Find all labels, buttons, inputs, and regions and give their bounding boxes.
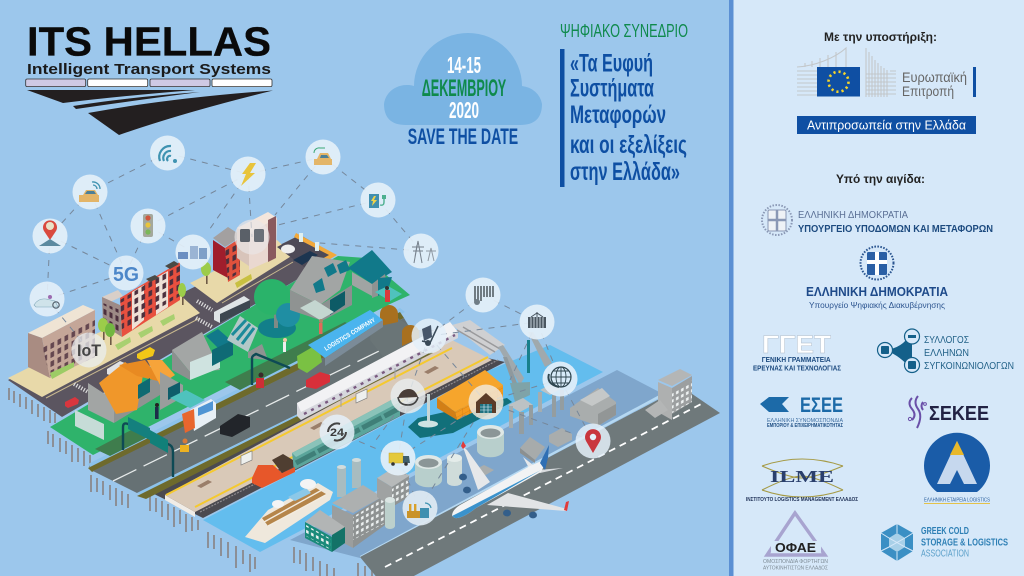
building: cream corner: [237, 212, 277, 270]
icon: 24 hours: 24: [330, 427, 345, 439]
scooter yellow: [180, 445, 189, 452]
dark green paths: [95, 322, 357, 456]
crosswalks: [74, 301, 212, 392]
cloud with dates: [384, 33, 542, 149]
road surface: [93, 318, 424, 493]
icon: public transport: [234, 220, 270, 254]
platform benches: [197, 366, 439, 488]
logo: GGET: ΓΕΝΙΚΗ ΓΡΑΜΜΑΤΕΙΑ: [762, 355, 831, 364]
driveway: [170, 390, 205, 408]
logo: OFAE: [763, 513, 829, 572]
logo: ILME: ΙΝΣΤΙΤΟΥΤΟ LOGISTICS MANAGEMENT ΕΛΛΑΔΟΣ: [746, 497, 859, 503]
rail lines: [158, 350, 498, 512]
road dashes: [113, 334, 414, 481]
pier posts: [9, 388, 372, 576]
logo: Ministry of Digital Governance: Υπουργείο Ψηφιακής Διακυβέρνησης: [809, 300, 945, 310]
logo: GGET: ΓΓΕΤ: [762, 331, 831, 359]
icon: IoT: [72, 332, 106, 368]
sidebar background: [734, 0, 1024, 576]
overhead road signs: [123, 354, 290, 477]
icon: charging station: [360, 182, 396, 218]
icon: cargo container: [520, 304, 554, 340]
icon: delivery hands: [390, 378, 426, 414]
conference kicker: ΨΗΦΙΑΚΟ ΣΥΝΕΔΡΙΟ: [560, 20, 688, 41]
icon: barcode: [466, 278, 500, 312]
building: red terrace: [102, 261, 180, 337]
land platform: [290, 370, 665, 558]
logo: ITS Hellas: [26, 18, 273, 135]
round tanks: [415, 425, 504, 487]
conference title: Μεταφορών: [570, 101, 666, 129]
building: left mauve: [28, 305, 95, 378]
cloud shape: [384, 33, 542, 125]
stabilizer: [523, 457, 538, 472]
logo wordmark: ITS HELLAS: [27, 18, 271, 64]
logo: Greek Cold Storage: [881, 524, 1008, 561]
people: [155, 286, 390, 419]
house: large grey: [290, 256, 352, 322]
main road with strips: [88, 308, 433, 499]
platform: [165, 340, 492, 512]
parked car: [293, 251, 318, 265]
main hall: [332, 485, 382, 513]
tracks: [152, 345, 505, 518]
factory: [305, 458, 410, 552]
logo: Hellenic Transport Engineers Association: ΕΛΛΗΝΩΝ: [924, 348, 969, 359]
big tree: [254, 279, 300, 338]
logo: SEKEE: [908, 396, 989, 428]
ministry text: ΕΛΛΗΝΙΚΗ ΔΗΜΟΚΡΑΤΙΑ: [798, 209, 908, 221]
date month: ΔΕΚΕΜΒΡΙΟΥ: [422, 75, 506, 102]
sidebar border: [729, 0, 734, 576]
logo: OFAE: ΟΦΑΕ: [775, 540, 816, 555]
billboards: [241, 389, 367, 465]
conference title: Συστήματα: [570, 74, 654, 102]
parking lot: [277, 233, 337, 272]
road edge lines: [46, 262, 293, 398]
conference title: [570, 50, 687, 186]
logo: Ministry of Digital Governance: [806, 246, 949, 310]
date days: 14-15: [447, 52, 481, 78]
representation banner: [797, 116, 976, 134]
logo: ESEE: ΕΣΕΕ: [800, 394, 843, 417]
upper train: [297, 322, 458, 420]
icon: location: [576, 424, 610, 458]
logo: ESEE: [760, 394, 844, 429]
logo: ESEE: ΕΜΠΟΡΙΟΥ & ΕΠΙΧΕΙΡΗΜΑΤΙΚΟΤΗΤΑΣ: [767, 423, 844, 429]
beige block left: [8, 293, 200, 397]
icon: globe: [542, 362, 578, 396]
parking dial: [281, 244, 295, 254]
icon: autonomous car: [30, 282, 64, 316]
sidebar panel: [729, 0, 1024, 576]
icon: hand trolley: [412, 318, 446, 354]
logo bars: [26, 79, 272, 87]
logo: Greek Cold Storage: GREEK COLD: [921, 526, 969, 537]
logo: GGET: ΕΡΕΥΝΑΣ ΚΑΙ ΤΕΧΝΟΛΟΓΙΑΣ: [753, 364, 841, 372]
platform edge: [165, 495, 195, 517]
logo: ILME: [746, 459, 859, 503]
bus: [214, 296, 250, 323]
lower freight train: [252, 398, 400, 488]
isometric smart city and logistics scene: [8, 136, 720, 576]
port sheds and crates: [474, 388, 616, 476]
runway: [360, 387, 720, 576]
blue line upper: [88, 308, 405, 469]
logo: Hellenic Transport Engineers Association: ΣΥΓΚΟΙΝΩΝΙΟΛΟΓΩΝ: [924, 361, 1014, 372]
black suv: [220, 414, 250, 437]
save the date: SAVE THE DATE: [408, 124, 518, 149]
icon: connected car: [72, 174, 108, 210]
hedge left: [50, 362, 74, 379]
white truck: [190, 399, 216, 431]
house: orange roof: [88, 360, 183, 423]
vehicles on road: [180, 310, 383, 452]
icon: smart factory: [402, 490, 438, 526]
icon: IoT: IoT: [77, 341, 102, 360]
title accent bar: [560, 49, 564, 187]
charging posts: [299, 233, 319, 251]
support heading: Με την υποστήριξη:: [824, 30, 937, 44]
seal: [762, 205, 792, 235]
icon: 5G: [108, 256, 144, 290]
parking yellow border: [294, 233, 337, 272]
logo: SEKEE: ΣΕΚΕΕ: [929, 403, 989, 425]
logo: Ministry of Infrastructure: ΥΠΟΥΡΓΕΙΟ ΥΠΟΔΟΜΩΝ ΚΑΙ ΜΕΤΑΦΟΡΩΝ: [798, 224, 993, 235]
chimneys: [337, 458, 361, 497]
logo: GGET: [753, 331, 841, 372]
commission name: Ευρωπαϊκή: [902, 69, 967, 85]
logo: Hellenic Logistics Society: [924, 433, 990, 504]
commission bar: [973, 67, 976, 97]
engines: [459, 474, 537, 518]
icon: power pylons: [404, 234, 438, 268]
small block: [377, 467, 410, 487]
logo: Hellenic Transport Engineers Association: [878, 329, 1014, 372]
seal: [860, 246, 894, 280]
tunnel wall: [370, 312, 444, 372]
icon: delivery truck: [380, 440, 416, 476]
wing near: [487, 493, 567, 511]
dashed network links: [47, 153, 593, 508]
city road dark: [8, 235, 335, 417]
street trees: [98, 262, 211, 345]
icon: wifi: [150, 136, 185, 170]
icon: 5G: 5G: [113, 264, 139, 286]
logo: European Commission: [797, 48, 976, 134]
beige block middle: [190, 240, 293, 303]
building graphic left: [797, 48, 846, 95]
driveway small: [375, 286, 402, 301]
runway-end building: [645, 369, 692, 420]
green residential block: [50, 256, 410, 455]
wing far: [463, 447, 490, 490]
logistics truck: LOGISTICS COMPANY: [323, 317, 377, 353]
teal block: [305, 510, 345, 535]
EU flag: [817, 67, 860, 96]
silo: [385, 500, 395, 529]
icon: map pin: [32, 218, 68, 254]
locomotive: [252, 465, 295, 488]
icon: lightning bolt: [230, 156, 266, 192]
conference title: στην Ελλάδα»: [570, 158, 680, 186]
icon: warehouse: [468, 384, 504, 420]
ministry text: ΕΛΛΗΝΙΚΗ ΔΗΜΟΚΡΑΤΙΑ: [806, 284, 949, 299]
auspices heading: Υπό την αιγίδα:: [836, 172, 925, 186]
cruise ship: [245, 479, 333, 543]
crane two: [527, 332, 564, 417]
fin: [540, 445, 549, 470]
logo: ESEE: ΕΛΛΗΝΙΚΗ ΣΥΝΟΜΟΣΠΟΝΔΙΑ: [767, 418, 843, 424]
cargo ship: [408, 370, 512, 438]
logo road swoosh: [27, 90, 273, 135]
platform yellow lines: [166, 348, 488, 507]
house: small teal: [348, 250, 392, 298]
icon: infrastructure: [176, 234, 210, 270]
conference title: και οι εξελίξεις: [570, 131, 687, 159]
building: red corner: [213, 227, 242, 282]
logo: OFAE: ΟΜΟΣΠΟΝΔΙΑ ΦΟΡΤΗΓΩΝ: [763, 559, 828, 565]
station canopy: [452, 320, 505, 355]
logo: Ministry of Infrastructure: [762, 205, 993, 235]
logo: European Commission: Επιτροπή: [902, 83, 954, 99]
date year: 2020: [449, 97, 479, 123]
hedges: [115, 314, 175, 350]
white wall: [75, 410, 104, 440]
red car: [306, 372, 330, 389]
land edge line: [360, 393, 665, 558]
runway centre dashes: [385, 402, 705, 567]
logo: ILME: ILME: [770, 467, 834, 486]
crane one: [498, 345, 533, 434]
water: [203, 345, 603, 552]
tunnel arches: [380, 305, 419, 346]
logo: Hellenic Logistics Society: ΕΛΛΗΝΙΚΗ ΕΤΑΙΡΕΙΑ LOGISTICS: [924, 498, 990, 504]
olive strip: [88, 312, 404, 472]
stair and sign: [235, 274, 252, 288]
fuselage: [452, 458, 548, 518]
icon: traffic light: [130, 208, 166, 244]
icon: 24 hours: [320, 414, 354, 450]
house: striped roof: [227, 316, 268, 360]
scooter red: [256, 378, 264, 388]
logo tagline: Intelligent Transport Systems: [27, 61, 271, 78]
airplane: [452, 441, 569, 518]
building graphic right: [866, 48, 896, 97]
logistics truck: [297, 310, 383, 373]
logo: European Commission: Αντιπροσωπεία στην Ελλάδα: [807, 118, 966, 132]
road lower strips: [137, 350, 430, 495]
logo: Hellenic Transport Engineers Association: ΣΥΛΛΟΓΟΣ: [924, 335, 969, 346]
cranes: [498, 332, 564, 434]
EU stars: [828, 72, 848, 92]
logo: Greek Cold Storage: ASSOCIATION: [921, 549, 969, 560]
crossing cars: [65, 347, 155, 408]
conference heading: [560, 20, 688, 187]
logo: OFAE: ΑΥΤΟΚΙΝΗΤΙΣΤΩΝ ΕΛΛΑΔΟΣ: [763, 566, 829, 572]
house: grey with teal: [172, 329, 233, 380]
conference title: «Τα Ευφυή: [570, 50, 653, 78]
icon: electric car: [306, 140, 340, 174]
